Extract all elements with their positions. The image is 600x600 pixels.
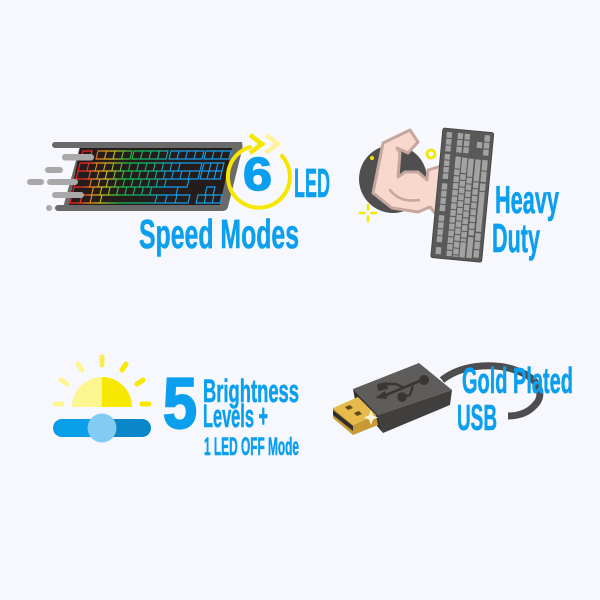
label: Duty: Duty	[492, 215, 540, 261]
feature: brightness levels	[53, 357, 299, 461]
number: 6: 6	[243, 148, 272, 200]
label: Speed Modes: Speed Modes	[139, 211, 299, 257]
text: LED	[294, 160, 330, 206]
icon: half sun	[72, 377, 132, 407]
feature: LED speed modes	[27, 135, 330, 257]
feature: heavy duty	[359, 128, 559, 262]
label: Brightness: Brightness	[203, 373, 299, 409]
feature: gold plated USB	[333, 360, 573, 438]
icon: sun rays	[55, 357, 149, 404]
icon: RGB keyboard	[52, 142, 242, 211]
text: 1 LED OFF Mode	[204, 433, 299, 461]
label: USB: USB	[457, 397, 497, 438]
number: 5: 5	[163, 365, 197, 444]
icon: yellow ring	[427, 150, 435, 158]
icon: USB cable	[442, 366, 540, 416]
icon: sparkle	[360, 205, 376, 221]
icon: speed lines	[27, 154, 94, 211]
icon: brightness slider	[53, 414, 151, 442]
icon: yellow cycle arrow	[228, 135, 290, 208]
icon: dark circle	[359, 145, 427, 213]
icon: flexing arm	[373, 130, 450, 216]
icon: USB plug body	[353, 363, 452, 433]
icon: grey keyboard	[431, 128, 494, 262]
icon: USB symbol	[375, 375, 429, 402]
icon: yellow dot	[370, 156, 374, 160]
label: Levels +: Levels +	[203, 398, 268, 434]
icon: bicep crease	[390, 190, 419, 201]
icon: USB gold connector	[333, 397, 378, 435]
